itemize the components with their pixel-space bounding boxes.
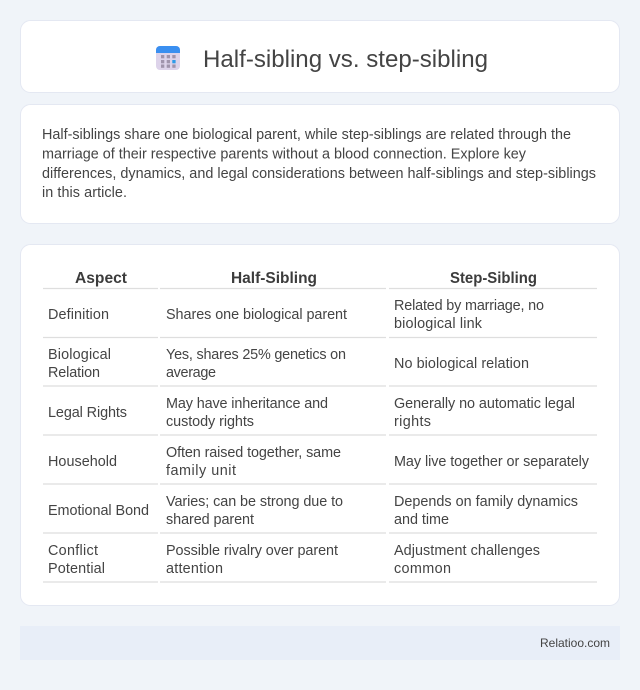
row: legal rights: May have inheritance and bbox=[166, 396, 328, 412]
row: emotional bond: and time bbox=[394, 512, 449, 528]
text block: introduction: in this article. bbox=[42, 185, 127, 201]
panel: introduction bbox=[20, 104, 620, 224]
row: emotional bond: shared parent bbox=[166, 512, 254, 528]
text block: introduction: Half-siblings share one biological parent, while step-siblings are related through the bbox=[42, 127, 571, 143]
footer bbox=[20, 626, 620, 660]
row: biological relation bbox=[48, 347, 529, 381]
row: conflict potential: Adjustment challenges bbox=[394, 543, 540, 559]
row: legal rights: rights bbox=[394, 414, 431, 430]
row: conflict potential: Potential bbox=[48, 561, 105, 577]
text block: introduction: marriage of their respective parents without a blood connection. Explore key bbox=[42, 146, 527, 162]
row: definition: biological link bbox=[394, 316, 483, 332]
row: biological relation: Relation bbox=[48, 365, 100, 381]
panel: comparison table bbox=[20, 244, 620, 606]
row: legal rights: Generally no automatic legal bbox=[394, 396, 575, 412]
table header: Half-Sibling bbox=[231, 270, 317, 287]
row: household: Often raised together, same bbox=[166, 445, 341, 461]
row: emotional bond bbox=[48, 494, 578, 528]
row: household: Household bbox=[48, 454, 117, 470]
table header bbox=[75, 270, 537, 287]
table header: Step-Sibling bbox=[450, 270, 537, 287]
row: definition: Definition bbox=[48, 307, 109, 323]
row: legal rights: Legal Rights bbox=[48, 405, 127, 421]
row: conflict potential: Possible rivalry over parent bbox=[166, 543, 338, 559]
row: definition: Shares one biological parent bbox=[166, 307, 347, 323]
text block: introduction: differences, dynamics, and legal considerations between half-siblings and step-siblings bbox=[42, 166, 596, 182]
icon: calendar bbox=[156, 46, 180, 70]
row: household bbox=[48, 445, 590, 479]
row: legal rights: custody rights bbox=[166, 414, 254, 430]
row: emotional bond: Emotional Bond bbox=[48, 503, 149, 519]
row: conflict potential: common bbox=[394, 561, 451, 577]
title: Half-sibling vs. step-sibling bbox=[203, 46, 488, 73]
row: legal rights bbox=[48, 396, 575, 430]
row: conflict potential: attention bbox=[166, 561, 223, 577]
row: definition bbox=[48, 298, 544, 332]
row: biological relation: Yes, shares 25% genetics on bbox=[166, 347, 346, 363]
text block: introduction bbox=[42, 127, 596, 201]
row: conflict potential bbox=[48, 543, 540, 577]
table header: Aspect bbox=[75, 270, 128, 287]
row: emotional bond: Varies; can be strong due to bbox=[166, 494, 343, 510]
row: household: May live together or separately bbox=[394, 454, 590, 470]
panel: header bbox=[20, 20, 620, 92]
row: biological relation: Biological bbox=[48, 347, 111, 363]
footer text: source: Relatioo.com bbox=[540, 636, 610, 650]
row: emotional bond: Depends on family dynamics bbox=[394, 494, 578, 510]
row: biological relation: average bbox=[166, 365, 216, 381]
row: biological relation: No biological relation bbox=[394, 356, 529, 372]
row: conflict potential: Conflict bbox=[48, 543, 98, 559]
row: definition: Related by marriage, no bbox=[394, 298, 544, 314]
row: household: family unit bbox=[166, 463, 236, 479]
